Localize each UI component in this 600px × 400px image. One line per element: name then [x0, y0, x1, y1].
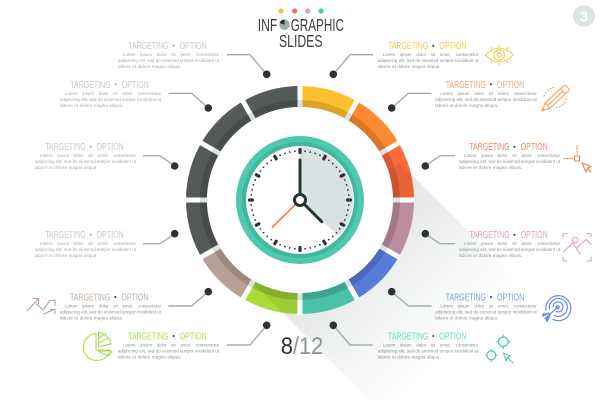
- hour hand: [300, 200, 322, 222]
- text block: right 1: [378, 41, 479, 69]
- text block: right 3: [459, 142, 561, 170]
- text block: left 6: TARGETING: [128, 332, 169, 342]
- title: GRAPHIC: [291, 15, 344, 35]
- icon: pencil: [539, 85, 570, 114]
- text block: right 1: labore et dolore magna aliqua.: [378, 64, 441, 69]
- text block: right 3: TARGETING: [469, 142, 510, 153]
- text block: left 5: labore et dolore magna aliqua.: [60, 316, 123, 320]
- text block: right 5: Lorem ipsum dolor sit amet, consectetur: [440, 304, 537, 308]
- text block: left 2: labore et dolore magna aliqua.: [60, 103, 123, 108]
- icon: zigzag arrows: [27, 298, 55, 314]
- connectors: [143, 55, 455, 345]
- text block: right 6: labore et dolore magna aliqua.: [378, 354, 441, 360]
- text block: left 3: Lorem ipsum dolor sit amet, consectetur: [40, 153, 137, 158]
- text block: right 4: [459, 230, 561, 258]
- text block: right 3: labore et dolore magna aliqua.: [459, 165, 522, 170]
- text block: left 4: OPTION: [97, 230, 124, 241]
- text block: left 6: labore et dolore magna aliqua.: [118, 354, 181, 360]
- text block: right 2: OPTION: [497, 80, 524, 91]
- text block: left 2: adipiscing elit, sed do eiusmod tempor incididunt ut: [60, 97, 162, 102]
- text block: right 6: adipiscing elit, sed do eiusmod tempor incididunt ut: [378, 348, 479, 354]
- text block: left 2: [60, 80, 162, 108]
- icon: picture frame: [563, 234, 591, 261]
- text block: right 4: TARGETING: [469, 230, 510, 241]
- text block: right 3: adipiscing elit, sed do eiusmod tempor incididunt ut: [459, 159, 561, 164]
- text block: right 6: [378, 332, 479, 360]
- text block: left 3: [35, 142, 137, 170]
- counter 8/12: 8/12: [281, 333, 323, 360]
- text block: left 5: TARGETING: [70, 292, 110, 304]
- segmented ring: [186, 86, 415, 315]
- icon: eye: [486, 45, 513, 65]
- text block: left 1: OPTION: [180, 41, 207, 52]
- text block: right 5: OPTION: [497, 292, 524, 304]
- elapsed time sector: [300, 147, 353, 236]
- second hand: [272, 200, 300, 227]
- clock: [236, 136, 364, 264]
- page number badge: [573, 5, 595, 27]
- title: INF: [258, 15, 277, 35]
- text block: right 4: adipiscing elit, sed do eiusmod tempor incididunt ut: [459, 247, 561, 252]
- text block: right 2: [435, 80, 537, 108]
- text block: left 1: Lorem ipsum dolor sit amet, consectetur: [123, 52, 220, 57]
- text block: left 2: Lorem ipsum dolor sit amet, consectetur: [65, 91, 162, 96]
- text block: left 4: adipiscing elit, sed do eiusmod tempor incididunt ut: [35, 247, 137, 252]
- text block: left 6: Lorem ipsum dolor sit amet, consectetur: [123, 342, 220, 348]
- text block: right 4: OPTION: [521, 230, 548, 241]
- title: SLIDES: [279, 31, 322, 51]
- text block: left 6: [118, 332, 220, 360]
- text block: left 6: adipiscing elit, sed do eiusmod tempor incididunt ut: [118, 348, 220, 354]
- minute dots: [251, 151, 349, 249]
- text block: left 5: adipiscing elit, sed do eiusmod tempor incididunt ut: [60, 310, 162, 314]
- text block: right 6: Lorem ipsum dolor sit amet, consectetur: [383, 342, 479, 348]
- text block: right 1: adipiscing elit, sed do eiusmod tempor incididunt ut: [378, 58, 479, 63]
- text block: left 6: OPTION: [180, 332, 207, 342]
- text block: right 1: OPTION: [439, 41, 466, 52]
- text block: left 4: TARGETING: [45, 230, 86, 241]
- page number badge: 3: [580, 8, 588, 26]
- text block: right 2: TARGETING: [446, 80, 486, 91]
- text block: left 4: Lorem ipsum dolor sit amet, consectetur: [40, 241, 137, 246]
- inner white disc: [207, 107, 393, 293]
- text block: right 2: adipiscing elit, sed do eiusmod tempor incididunt ut: [435, 97, 537, 102]
- text block: right 6: TARGETING: [388, 332, 428, 342]
- title: [258, 8, 344, 51]
- text block: right 2: labore et dolore magna aliqua.: [435, 103, 498, 108]
- text block: right 4: Lorem ipsum dolor sit amet, consectetur: [464, 241, 561, 246]
- text block: left 2: OPTION: [122, 80, 149, 91]
- text block: left 5: Lorem ipsum dolor sit amet, consectetur: [65, 304, 162, 308]
- text block: left 3: TARGETING: [45, 142, 86, 153]
- text block: left 1: TARGETING: [128, 41, 169, 52]
- text block: right 3: Lorem ipsum dolor sit amet, consectetur: [464, 153, 561, 158]
- long shadow: [251, 163, 600, 400]
- text block: left 3: OPTION: [97, 142, 124, 153]
- text block: right 1: Lorem ipsum dolor sit amet, consectetur: [383, 52, 479, 57]
- text block: left 2: TARGETING: [70, 80, 111, 91]
- text block: right 6: OPTION: [439, 332, 466, 342]
- text block: right 3: OPTION: [521, 142, 548, 153]
- minute hand: [298, 160, 302, 200]
- icon: cursor selection: [564, 146, 591, 172]
- text block: left 4: labore et dolore magna aliqua.: [35, 253, 98, 258]
- text block: left 1: labore et dolore magna aliqua.: [118, 64, 181, 69]
- text block: left 3: adipiscing elit, sed do eiusmod tempor incididunt ut: [35, 159, 137, 164]
- text block: right 5: adipiscing elit, sed do eiusmod tempor incididunt ut: [435, 310, 537, 314]
- text block: left 1: adipiscing elit, sed do eiusmod tempor incididunt ut: [118, 58, 220, 63]
- icon: crosshairs and cursor: [486, 335, 513, 363]
- text block: right 5: TARGETING: [446, 292, 486, 304]
- hour marks: [248, 148, 352, 252]
- text block: right 4: labore et dolore magna aliqua.: [459, 253, 522, 258]
- text block: left 5: [60, 292, 162, 320]
- text block: left 5: OPTION: [121, 292, 148, 304]
- text block: right 5: labore et dolore magna aliqua.: [435, 316, 498, 320]
- text block: right 5: [435, 292, 537, 320]
- icon: pie chart: [83, 332, 112, 360]
- text block: left 1: [118, 41, 220, 69]
- icon: target: [542, 296, 571, 322]
- hub: [294, 194, 306, 206]
- text block: left 3: labore et dolore magna aliqua.: [35, 165, 98, 170]
- text block: right 1: TARGETING: [388, 41, 428, 52]
- text block: right 2: Lorem ipsum dolor sit amet, consectetur: [440, 91, 537, 96]
- text block: left 4: [35, 230, 137, 258]
